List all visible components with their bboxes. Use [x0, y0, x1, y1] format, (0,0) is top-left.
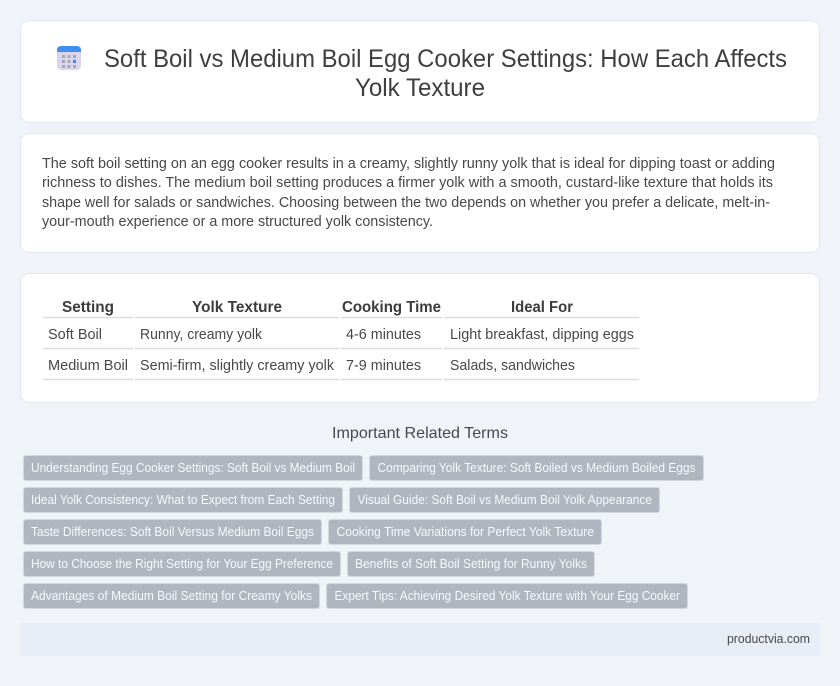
tag	[24, 584, 320, 608]
table header row: Cooking Time	[342, 299, 441, 316]
tag: Comparing Yolk Texture: Soft Boiled vs Medium Boiled Eggs	[378, 461, 696, 475]
table row: medium boil: 7-9 minutes	[346, 358, 421, 374]
tag	[326, 584, 688, 608]
tag: Benefits of Soft Boil Setting for Runny Yolks	[355, 557, 587, 571]
tag: Expert Tips: Achieving Desired Yolk Texture with Your Egg Cooker	[334, 589, 680, 603]
table row: soft boil	[43, 327, 639, 348]
panel: title header	[20, 20, 820, 122]
table row: medium boil: Medium Boil	[48, 358, 128, 374]
footer bar	[20, 623, 820, 656]
table header row: Setting	[62, 299, 114, 316]
table header row: Ideal For	[511, 299, 573, 316]
tag	[350, 488, 660, 512]
table header row: Yolk Texture	[192, 299, 282, 316]
table row: medium boil	[43, 358, 639, 380]
summary text block	[42, 156, 775, 230]
tag	[328, 520, 602, 544]
tag	[24, 488, 342, 512]
tag: How to Choose the Right Setting for Your Egg Preference	[31, 557, 333, 571]
table row: soft boil: Runny, creamy yolk	[140, 327, 263, 343]
table header row	[43, 299, 639, 318]
title text: Soft Boil vs Medium Boil Egg Cooker Settings: How Each Affects	[104, 45, 787, 73]
table row: medium boil: Semi-firm, slightly creamy yolk	[140, 358, 335, 374]
tag	[348, 552, 594, 576]
table row: medium boil: Salads, sandwiches	[450, 358, 575, 374]
panel: summary paragraph	[20, 134, 820, 252]
tag	[24, 520, 322, 544]
panel: comparison table	[20, 274, 820, 402]
tag	[24, 456, 362, 480]
title text	[104, 45, 787, 102]
tag: Ideal Yolk Consistency: What to Expect from Each Setting	[31, 493, 335, 507]
table row: soft boil: 4-6 minutes	[346, 327, 421, 343]
icon: calendar grid	[57, 46, 81, 70]
table row: soft boil: Light breakfast, dipping eggs	[450, 327, 634, 343]
summary text block: your-mouth experience or a more structured yolk consistency.	[42, 214, 433, 230]
tag: Understanding Egg Cooker Settings: Soft Boil vs Medium Boil	[31, 461, 355, 475]
heading: important related terms: Important Related Terms	[332, 425, 508, 442]
footer source text: productvia.com	[727, 632, 810, 646]
related term tags	[24, 456, 704, 608]
title text: Yolk Texture	[355, 74, 485, 102]
tag: Cooking Time Variations for Perfect Yolk Texture	[336, 525, 594, 539]
tag: Visual Guide: Soft Boil vs Medium Boil Yolk Appearance	[358, 493, 652, 507]
summary text block: The soft boil setting on an egg cooker results in a creamy, slightly runny yolk that is ideal for dipping toast or adding	[42, 156, 775, 172]
summary text block: shape well for salads or sandwiches. Choosing between the two depends on whether you prefer a delicate, melt-in-	[42, 195, 770, 211]
table row: soft boil: Soft Boil	[48, 327, 102, 343]
tag: Advantages of Medium Boil Setting for Creamy Yolks	[31, 589, 312, 603]
tag	[370, 456, 704, 480]
tag: Taste Differences: Soft Boil Versus Medium Boil Eggs	[31, 525, 314, 539]
tag	[24, 552, 340, 576]
summary text block: richness to dishes. The medium boil setting produces a firmer yolk with a smooth, custard-like texture that holds its	[42, 175, 773, 191]
